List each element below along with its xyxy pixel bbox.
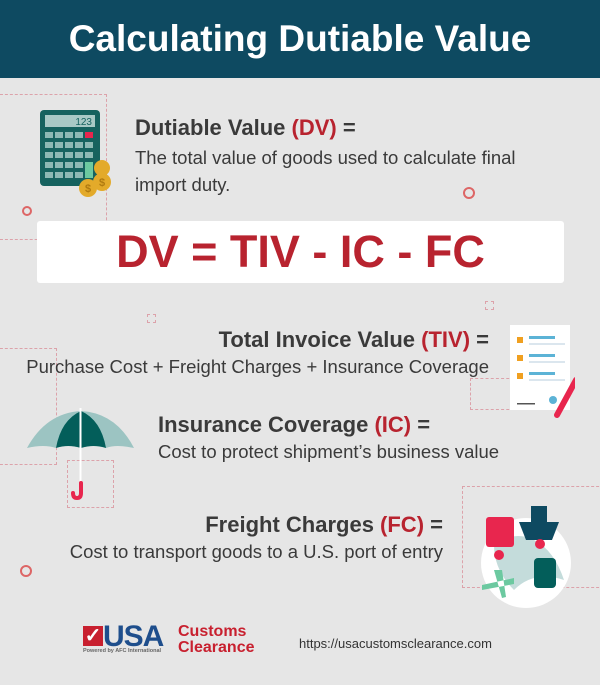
text: IC: Cost to protect shipment’s business value (158, 441, 499, 462)
heading: IC: Insurance Coverage (IC) = (158, 412, 430, 437)
logo: ✓ (85, 625, 101, 647)
icon: globe with transport (481, 506, 571, 608)
icon: calculator: $ (99, 177, 105, 189)
logo: USA (103, 620, 163, 653)
logo (83, 620, 254, 656)
text: FC: Cost to transport goods to a U.S. port of entry (70, 541, 443, 562)
formula box (37, 221, 564, 283)
text: dutiable value definition: The total value of goods used to calculate final import duty. (135, 147, 516, 195)
heading: FC: Freight Charges (FC) = (205, 512, 443, 537)
url: https://usacustomsclearance.com (299, 636, 492, 651)
header (0, 0, 600, 78)
logo: Powered by AFC International (83, 648, 161, 654)
icon: calculator (40, 110, 111, 197)
heading: dutiable value: Dutiable Value (DV) = (135, 115, 356, 140)
icon: calculator: 123 (75, 117, 92, 128)
icon: invoice with pen (510, 325, 575, 418)
icon: calculator: $ (85, 183, 91, 195)
header: Calculating Dutiable Value (69, 18, 531, 59)
logo: Clearance (178, 639, 254, 656)
text: TIV: Purchase Cost + Freight Charges + Insurance Coverage (26, 356, 489, 377)
logo: Customs (178, 623, 246, 640)
icon: umbrella (27, 408, 134, 500)
formula box: DV = TIV - IC - FC (116, 226, 485, 277)
heading: TIV: Total Invoice Value (TIV) = (219, 327, 489, 352)
